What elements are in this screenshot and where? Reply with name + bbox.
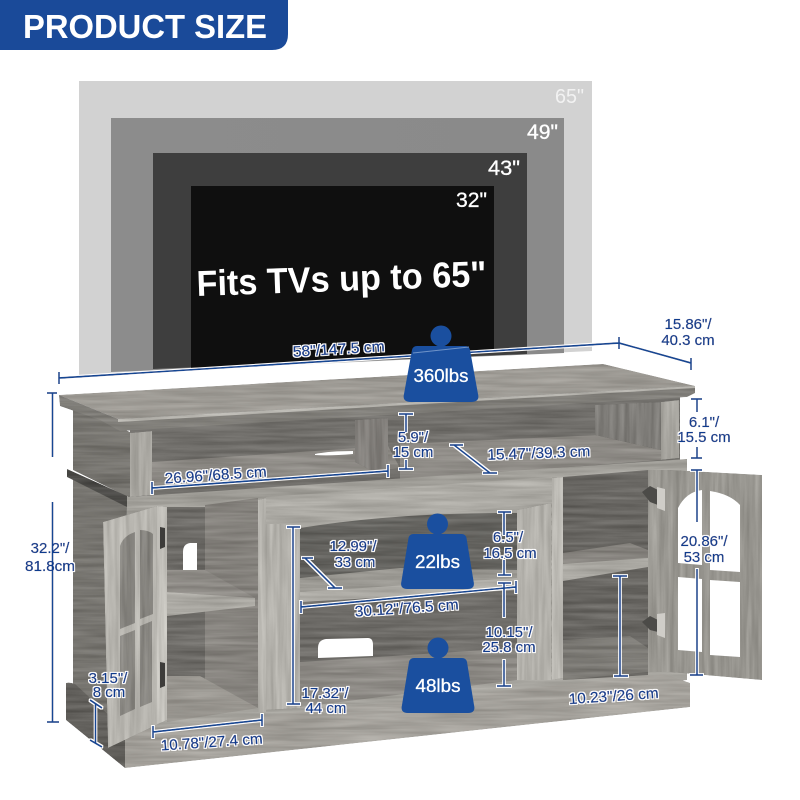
central depth 12.99 in: 33 cm <box>335 554 375 571</box>
posts, vertical grain <box>103 400 762 748</box>
total height 32.2 in: 81.8cm <box>25 558 75 575</box>
right door glass panes and cable cutouts <box>183 451 740 658</box>
depth 15.86 in: 15.86"/ <box>664 316 712 333</box>
hutch depth 15.47 in: 15.47"/39.3 cm <box>487 443 591 464</box>
hutch height 6.1 in: 15.5 cm <box>677 429 731 446</box>
base plinth front <box>125 674 690 768</box>
left cabinet back <box>167 507 205 710</box>
left open door <box>103 506 167 748</box>
plinth side <box>66 683 125 768</box>
central width 30.12 in: 30.12"/76.5 cm <box>354 596 459 621</box>
hutch height 6.1 in: 6.1"/ <box>689 414 720 431</box>
central opening upper back <box>300 513 517 600</box>
header banner: product size <box>0 0 288 50</box>
central depth 12.99 in <box>302 538 377 588</box>
total height 32.2 in: 32.2"/ <box>31 540 70 557</box>
plinth height 3.15 in <box>89 670 128 747</box>
left cabinet width 10.78 in <box>153 714 263 755</box>
hutch width 26.96 in <box>152 463 388 494</box>
right shelf surface <box>563 543 648 572</box>
door hinges and handles <box>160 486 665 688</box>
right inner hutch wall <box>595 402 661 450</box>
49 inch screen: 49" <box>527 121 558 144</box>
right open door <box>670 470 762 680</box>
upper opening 6.5 in <box>483 512 537 575</box>
43 inch screen: 43" <box>488 157 520 180</box>
top front edge <box>59 386 695 431</box>
TV stand illustration <box>59 364 762 768</box>
hutch ledge front <box>127 459 687 507</box>
central left posts <box>258 498 266 712</box>
width 58 in <box>59 337 619 384</box>
fits TVs headline: Fits TVs up to 65" <box>196 253 487 304</box>
right shelf front <box>563 558 648 581</box>
door height 20.86 in: 20.86"/ <box>680 533 728 550</box>
right cabinet floor <box>563 636 648 680</box>
central shelf front <box>300 578 517 602</box>
hutch width 26.96 in: 26.96"/68.5 cm <box>164 463 267 488</box>
weight capacity: top 360 lbs: 360lbs <box>414 365 468 386</box>
central shelf surface <box>300 568 517 592</box>
central width 30.12 in <box>301 581 516 621</box>
lower carcass front <box>127 466 687 745</box>
weight capacity: bottom shelf 48 lbs: 48lbs <box>416 675 460 696</box>
left shelf surface <box>167 570 255 598</box>
plinth height 3.15 in: 8 cm <box>93 684 125 701</box>
49 inch screen <box>111 118 564 372</box>
central opening lower back <box>300 585 517 664</box>
lower opening 10.15 in <box>482 583 536 686</box>
plinth height 3.15 in: 3.15"/ <box>89 670 128 687</box>
central height 17.32 in <box>287 527 349 717</box>
depth 15.86 in <box>619 316 715 370</box>
TV size comparison <box>79 81 592 375</box>
hutch floor <box>152 446 400 490</box>
top surface <box>59 364 695 419</box>
hutch left post <box>130 431 152 497</box>
left cabinet floor <box>167 676 258 722</box>
left side panel lower <box>73 472 127 750</box>
stand body, horizontal grain <box>59 364 695 768</box>
dimensions <box>25 316 731 755</box>
left door windows <box>120 532 135 629</box>
weight capacity: bottom shelf 48 lbs <box>402 638 474 713</box>
weight capacity: middle shelf 22 lbs: 22lbs <box>415 551 460 572</box>
central right posts <box>517 503 551 680</box>
right cabinet height 10.23 in: 10.23"/26 cm <box>568 685 659 708</box>
width 58 in: 58"/147.5 cm <box>292 338 385 361</box>
door height 20.86 in <box>680 470 728 675</box>
central arch header <box>266 477 552 530</box>
left cabinet width 10.78 in: 10.78"/27.4 cm <box>160 730 263 755</box>
left cabinet side wall <box>205 498 258 708</box>
hutch right post <box>661 400 679 460</box>
central floor <box>300 648 517 707</box>
central height 17.32 in: 17.32"/ <box>301 685 349 702</box>
depth 15.86 in: 40.3 cm <box>661 332 715 349</box>
hutch opening 5.9 in: 15 cm <box>393 444 433 461</box>
hutch centre divider <box>355 418 388 472</box>
left side panel upper <box>73 408 130 498</box>
hutch height 6.1 in <box>677 399 731 458</box>
lower opening 10.15 in: 10.15"/ <box>485 624 533 641</box>
central depth 12.99 in: 12.99"/ <box>329 538 377 555</box>
lower opening 10.15 in: 25.8 cm <box>482 639 536 656</box>
43 inch screen <box>153 153 527 369</box>
hutch opening 5.9 in <box>393 414 433 469</box>
door height 20.86 in: 53 cm <box>684 549 724 566</box>
hutch opening 5.9 in: 5.9"/ <box>398 429 429 446</box>
hutch depth 15.47 in <box>450 443 591 473</box>
total height 32.2 in <box>25 393 75 722</box>
65 inch screen <box>79 81 592 375</box>
left shelf front <box>167 592 255 616</box>
hutch ledge left side <box>67 469 127 507</box>
central height 17.32 in: 44 cm <box>306 700 346 717</box>
32 inch screen <box>191 186 494 368</box>
32 inch screen: 32" <box>456 189 487 212</box>
upper opening 6.5 in: 6.5"/ <box>493 529 524 546</box>
right cabinet height 10.23 in <box>568 576 659 708</box>
right cabinet back <box>563 470 648 680</box>
upper opening 6.5 in: 16.5 cm <box>483 545 537 562</box>
upper hutch back <box>130 395 680 497</box>
65 inch screen: 65" <box>555 86 584 108</box>
right door post <box>648 470 670 672</box>
weight capacity: top 360 lbs <box>404 326 478 402</box>
weight capacity: middle shelf 22 lbs <box>401 514 474 589</box>
header banner: product size: PRODUCT SIZE <box>23 8 267 45</box>
